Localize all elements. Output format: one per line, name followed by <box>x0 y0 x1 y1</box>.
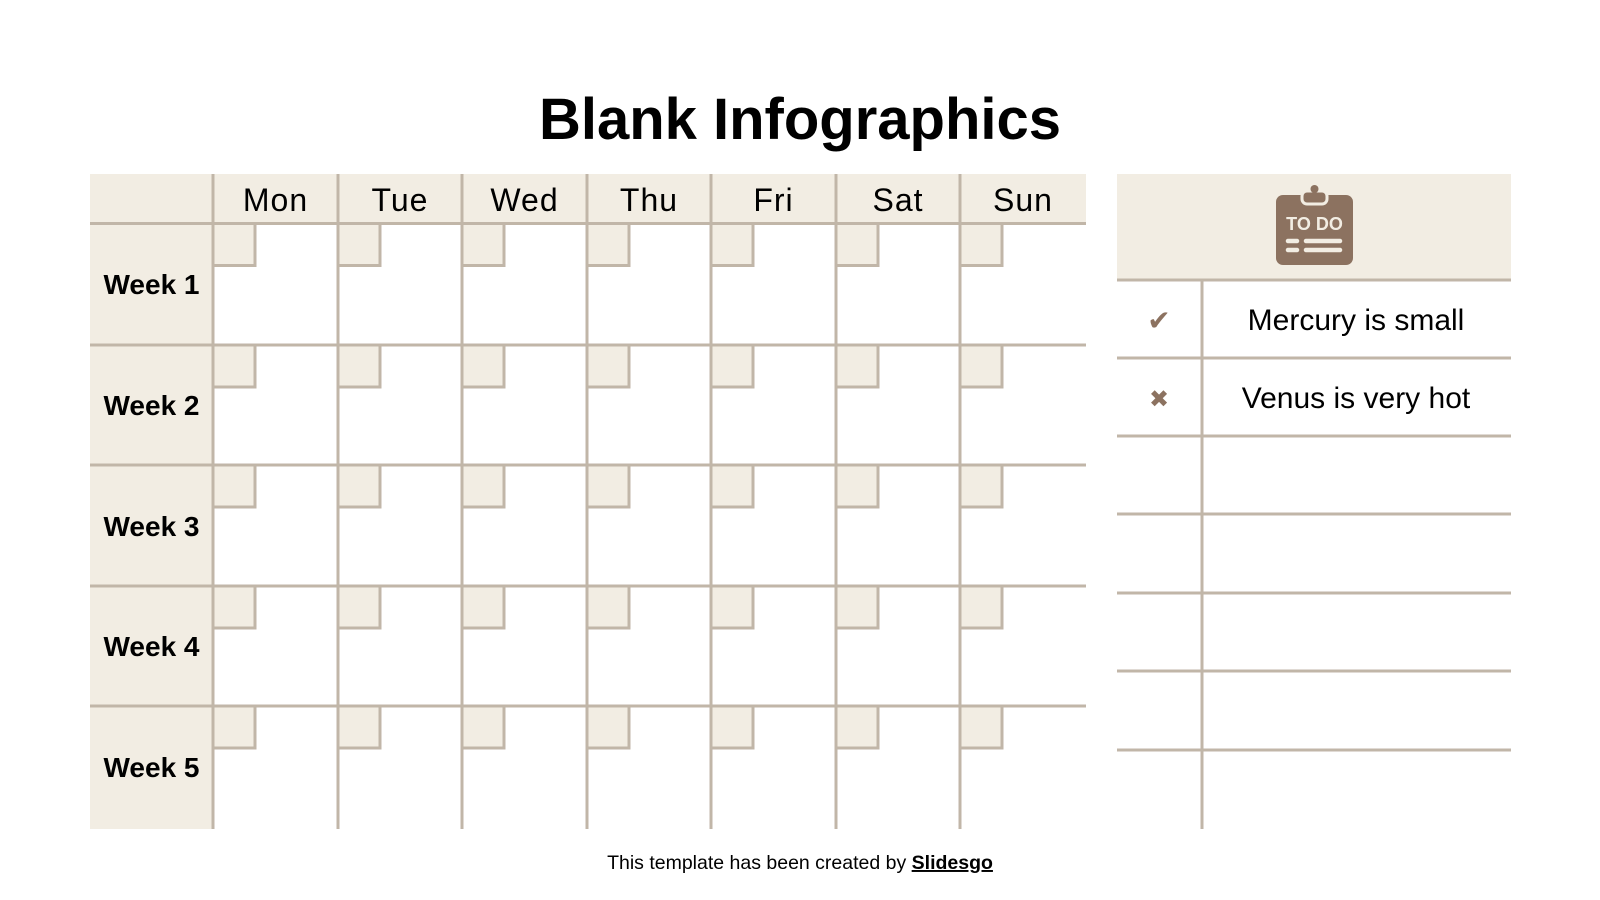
item: check <box>1147 304 1464 337</box>
week labels <box>104 269 200 783</box>
day headers: Fri <box>753 182 794 218</box>
week labels: Week 2 <box>104 390 200 421</box>
day headers: Tue <box>372 182 428 218</box>
icon: to do clipboard: TO DO <box>1286 214 1343 234</box>
panel: calendar <box>90 174 1086 829</box>
day headers: Sat <box>872 182 924 218</box>
day headers: Wed <box>490 182 559 218</box>
week labels: Week 1 <box>104 269 200 300</box>
day headers: Sun <box>993 182 1053 218</box>
item: check: Mercury is small <box>1248 304 1464 337</box>
day headers: Mon <box>243 182 308 218</box>
week labels: Week 4 <box>104 631 200 662</box>
item: cross: ✖ <box>1149 386 1169 413</box>
footer: This template has been created by Slidesgo <box>607 852 993 874</box>
week labels: Week 5 <box>104 752 200 783</box>
item: check: ✔ <box>1147 305 1171 336</box>
icon: to do clipboard <box>1276 185 1353 265</box>
item: cross: Venus is very hot <box>1242 382 1471 415</box>
panel: to do list <box>1117 174 1511 829</box>
title: Blank Infographics <box>539 87 1061 152</box>
day headers: Thu <box>620 182 678 218</box>
week labels: Week 3 <box>104 511 200 542</box>
day headers <box>243 182 1053 218</box>
